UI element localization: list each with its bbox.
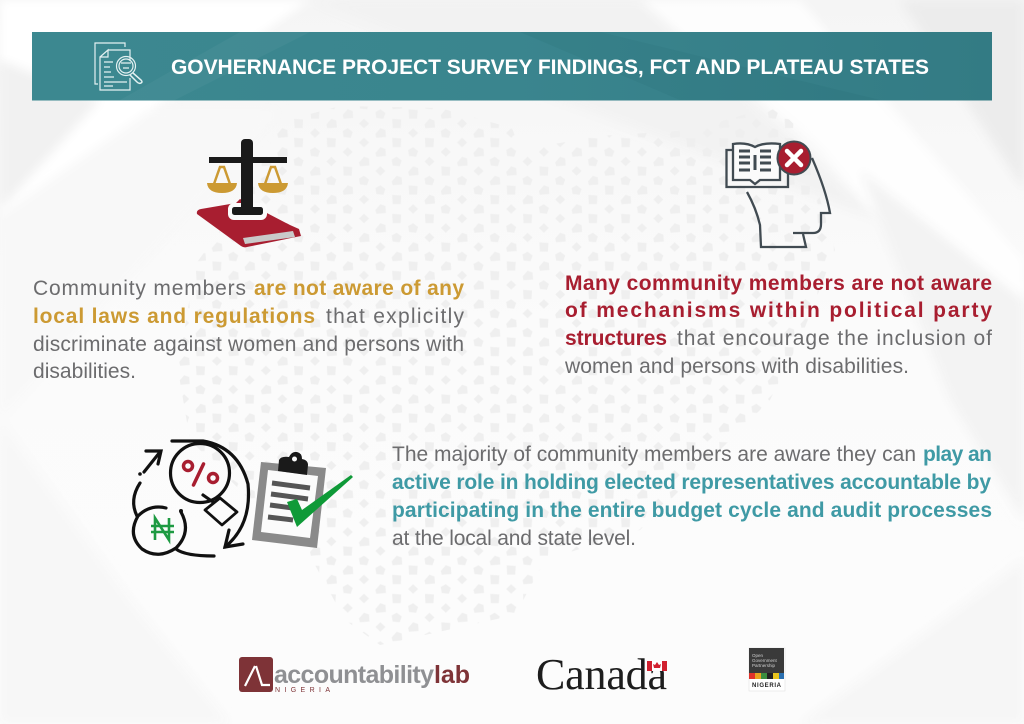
- text block: budget cycle participation: The majority of community members are aware they can: [392, 443, 916, 466]
- text block: local laws: local laws and regulations: [33, 305, 315, 328]
- text block: local laws: are not aware of any: [254, 277, 464, 300]
- logo: Open Government Partnership Nigeria: Partnership: [752, 663, 776, 668]
- text block: local laws: discriminate against women and persons with: [33, 333, 464, 356]
- text block: local laws: disabilities.: [33, 360, 136, 383]
- text block: political party mechanisms: structures: [565, 327, 667, 350]
- title banner: [32, 32, 992, 100]
- logo: Accountability Lab Nigeria: accountability: [274, 661, 434, 689]
- logo: Accountability Lab Nigeria: NIGERIA: [275, 687, 330, 694]
- logo: Accountability Lab Nigeria: lab: [434, 661, 470, 689]
- text block: local laws: that explicitly: [326, 305, 464, 328]
- text block: budget cycle participation: active role in holding elected representatives accountable by: [392, 471, 991, 494]
- logo: Open Government Partnership Nigeria: Open: [752, 653, 764, 658]
- text block: budget cycle participation: [392, 443, 992, 550]
- logo: Open Government Partnership Nigeria: NIGERIA: [752, 683, 782, 689]
- icon: head with open book and red cross: [726, 142, 830, 247]
- icon: scales of justice on red book: [197, 139, 301, 247]
- text block: political party mechanisms: of mechanisms within political party: [565, 299, 992, 322]
- banner heading: GOVHERNANCE PROJECT SURVEY FINDINGS, FCT AND PLATEAU STATES: [171, 56, 929, 79]
- text block: budget cycle participation: play an: [923, 443, 992, 466]
- icon: document with magnifier: [95, 43, 142, 90]
- text block: local laws: [33, 277, 464, 383]
- logo: Open Government Partnership Nigeria: Government: [752, 658, 778, 663]
- logo: Accountability Lab Nigeria: [239, 657, 470, 694]
- logo: Canada wordmark: Canada: [536, 650, 667, 699]
- text block: political party mechanisms: that encourage the inclusion of: [677, 327, 992, 350]
- text block: political party mechanisms: [564, 272, 992, 378]
- text block: budget cycle participation: participating in the entire budget cycle and audit processes: [392, 499, 992, 522]
- logo: Open Government Partnership Nigeria: [749, 648, 785, 691]
- background: dotted map of Nigeria: [178, 106, 835, 645]
- text block: political party mechanisms: Many community members are not aware: [565, 272, 992, 295]
- text block: budget cycle participation: at the local and state level.: [392, 527, 636, 550]
- icon: budget cycle with clipboard check: [133, 441, 353, 556]
- text block: local laws: Community members: [33, 277, 246, 300]
- text block: political party mechanisms: women and persons with disabilities.: [564, 355, 909, 378]
